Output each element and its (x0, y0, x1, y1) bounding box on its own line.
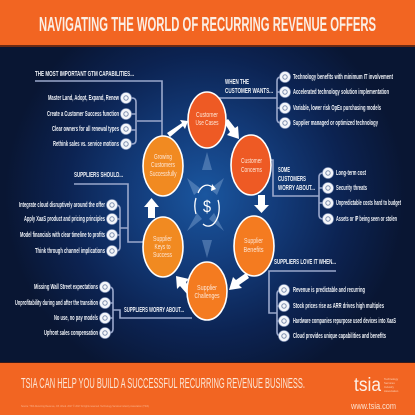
logo: tsia: tsia (354, 375, 381, 396)
arrow: concerns to benefits (254, 195, 269, 213)
circle: growing customers successfully: Successfully (150, 169, 177, 178)
panel: some customers worry about: SOME (278, 167, 290, 174)
panel: suppliers love it when (269, 259, 396, 342)
panel: suppliers should: Integrate cloud disruptively around the offer (19, 202, 105, 209)
panel: GTM capabilities (35, 71, 162, 150)
center pointers (187, 152, 224, 258)
panel: GTM capabilities: THE MOST IMPORTANT GTM CAPABILITIES... (35, 71, 134, 78)
icon: dollar cycle: $ (203, 197, 211, 216)
panel: some customers worry about: WORRY ABOUT... (278, 185, 315, 192)
circle: supplier challenges: Challenges (194, 291, 220, 300)
icon: dollar cycle (195, 184, 219, 226)
panel: GTM capabilities: Clear owners for all renewal types (52, 126, 119, 133)
panel: suppliers should: Think through channel implications (35, 248, 105, 255)
circle: supplier keys to success: Keys to (154, 242, 170, 251)
circle: growing customers successfully: Growing (154, 152, 172, 161)
panel: suppliers worry about: Missing Wall Street expectations (34, 284, 98, 291)
panel: when the customer wants: CUSTOMER WANTS... (225, 88, 273, 95)
arrow: use cases to concerns (224, 119, 239, 139)
source note: Source: TSIA Recurring Revenue, J.B. Wood. 2017 © 2017 All rights reserved. Technology Services Industry Association (TSIA) (21, 404, 149, 408)
circle: customer concerns: Customer (241, 156, 262, 165)
panel: GTM capabilities: Master Land, Adopt, Expand, Renew (48, 95, 119, 102)
panel: suppliers love it when: Revenue is predictable and recurring (293, 287, 365, 294)
panel: suppliers worry about: Unprofitability during and after the transition (15, 300, 98, 307)
logo: tsia: Services (384, 381, 395, 385)
panel: some customers worry about (271, 160, 401, 224)
panel: when the customer wants: WHEN THE (225, 79, 249, 86)
panel: suppliers should: SUPPLIERS SHOULD... (74, 172, 123, 179)
panel: some customers worry about: CUSTOMERS (278, 176, 306, 183)
panel: suppliers worry about: SUPPLIERS WORRY ABOUT... (124, 307, 184, 314)
logo: tsia (354, 375, 399, 396)
circle: supplier challenges: Supplier (197, 283, 217, 292)
panel: suppliers worry about (15, 282, 192, 338)
panel: GTM capabilities: Create a Customer Success function (47, 111, 119, 118)
arrow: challenges to keys (176, 276, 190, 294)
logo: tsia: Industry (384, 385, 395, 389)
panel: suppliers should: Apply XaaS product and pricing principles (24, 216, 105, 223)
circle: supplier challenges (187, 262, 227, 320)
circle: supplier benefits (234, 216, 274, 276)
arrow: growing to use cases (167, 120, 188, 137)
circle: growing customers successfully (143, 136, 183, 196)
header banner (0, 0, 415, 47)
circle: customer concerns (231, 135, 271, 195)
logo: tsia: Technology (384, 377, 399, 381)
circle: customer concerns: Concerns (241, 165, 262, 174)
circle: customer use cases (188, 92, 226, 148)
panel: suppliers worry about: Upfront sales compensation (44, 330, 98, 337)
panel: some customers worry about: Long-term cost (336, 170, 366, 177)
panel: suppliers worry about: No use, no pay models (54, 315, 98, 322)
circle: growing customers successfully: Customers (151, 160, 175, 169)
circle: customer use cases: Use Cases (196, 118, 219, 127)
panel: when the customer wants (218, 72, 393, 128)
panel: some customers worry about: Security threats (336, 185, 367, 192)
footer banner (0, 362, 415, 415)
panel: suppliers love it when: SUPPLIERS LOVE IT WHEN... (274, 259, 336, 266)
circle: supplier keys to success: Success (153, 250, 172, 259)
circle: supplier keys to success (143, 217, 183, 277)
website: www.tsia.com (350, 401, 396, 411)
background panel (0, 46, 415, 364)
logo: tsia: Association (384, 389, 399, 393)
circle: supplier benefits: Supplier (244, 236, 263, 245)
panel: suppliers should: Model financials with clear timeline to profits (20, 232, 105, 239)
arrow: keys to growing (144, 198, 159, 218)
circle: supplier keys to success: Supplier (153, 234, 172, 243)
circle: customer use cases: Customer (196, 110, 218, 119)
panel: GTM capabilities: Rethink sales vs. service motions (53, 141, 119, 148)
circle: supplier benefits: Benefits (244, 245, 264, 254)
panel: suppliers should (19, 172, 144, 256)
arrow: benefits to challenges (229, 273, 249, 290)
